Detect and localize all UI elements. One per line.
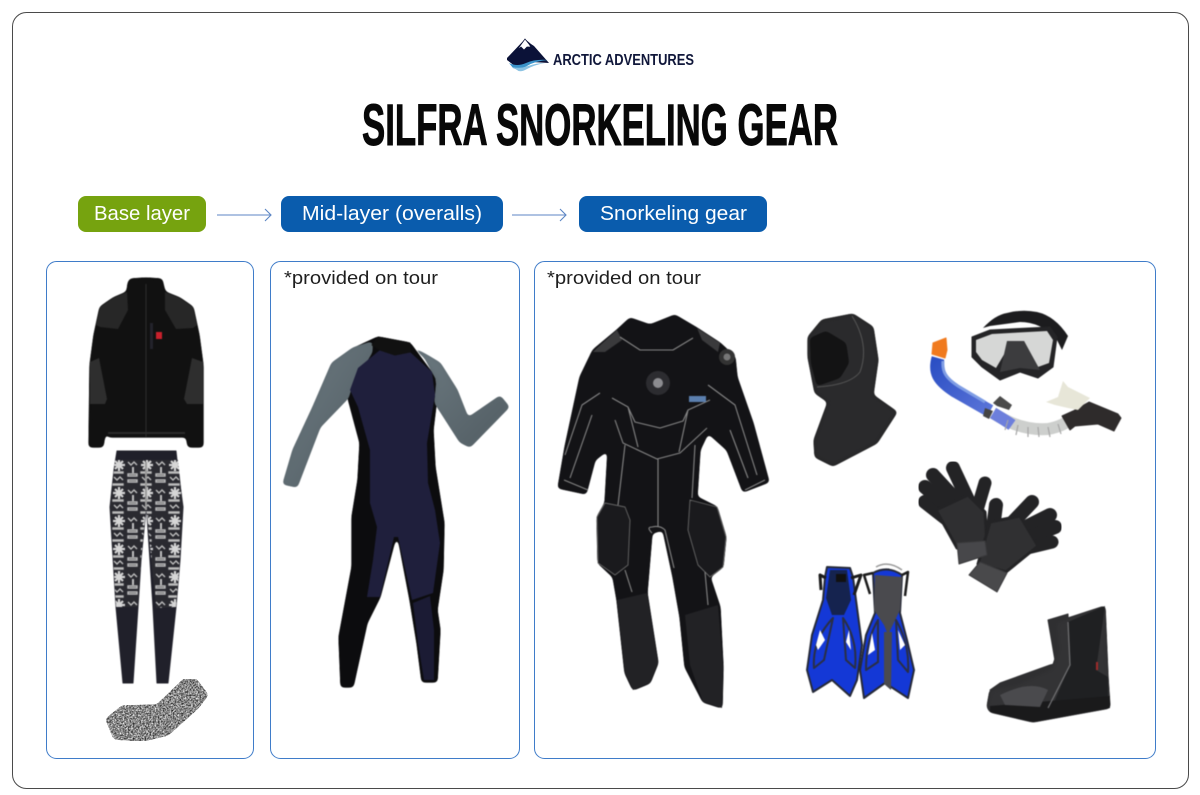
panel: base layer <box>46 262 254 758</box>
arrow: base to mid <box>217 209 271 221</box>
snorkel <box>932 338 1121 437</box>
step: snorkeling gear: Snorkeling gear <box>600 203 747 225</box>
panel: snorkeling gear <box>534 262 1156 758</box>
arrow: mid to gear <box>512 209 566 221</box>
step: base layer <box>78 196 206 232</box>
socks <box>106 679 208 741</box>
jacket <box>89 278 203 447</box>
logo: Arctic Adventures <box>507 39 694 71</box>
gloves <box>925 468 1055 592</box>
wetsuit <box>283 337 509 687</box>
fins <box>807 564 914 698</box>
panel: mid-layer <box>270 262 520 758</box>
logo: Arctic Adventures: ARCTIC ADVENTURES <box>553 52 694 69</box>
step: base layer: Base layer <box>94 203 190 225</box>
hood <box>808 314 897 466</box>
leggings <box>110 451 183 683</box>
boots <box>987 606 1110 722</box>
note: provided on tour: *provided on tour <box>547 268 701 288</box>
note: provided on tour: *provided on tour <box>284 268 438 288</box>
step: snorkeling gear <box>579 196 767 232</box>
step: mid-layer: Mid-layer (overalls) <box>302 203 482 225</box>
mask <box>972 311 1068 380</box>
step: mid-layer <box>281 196 503 232</box>
drysuit <box>558 315 769 708</box>
title: SILFRA SNORKELING GEAR <box>362 93 838 158</box>
